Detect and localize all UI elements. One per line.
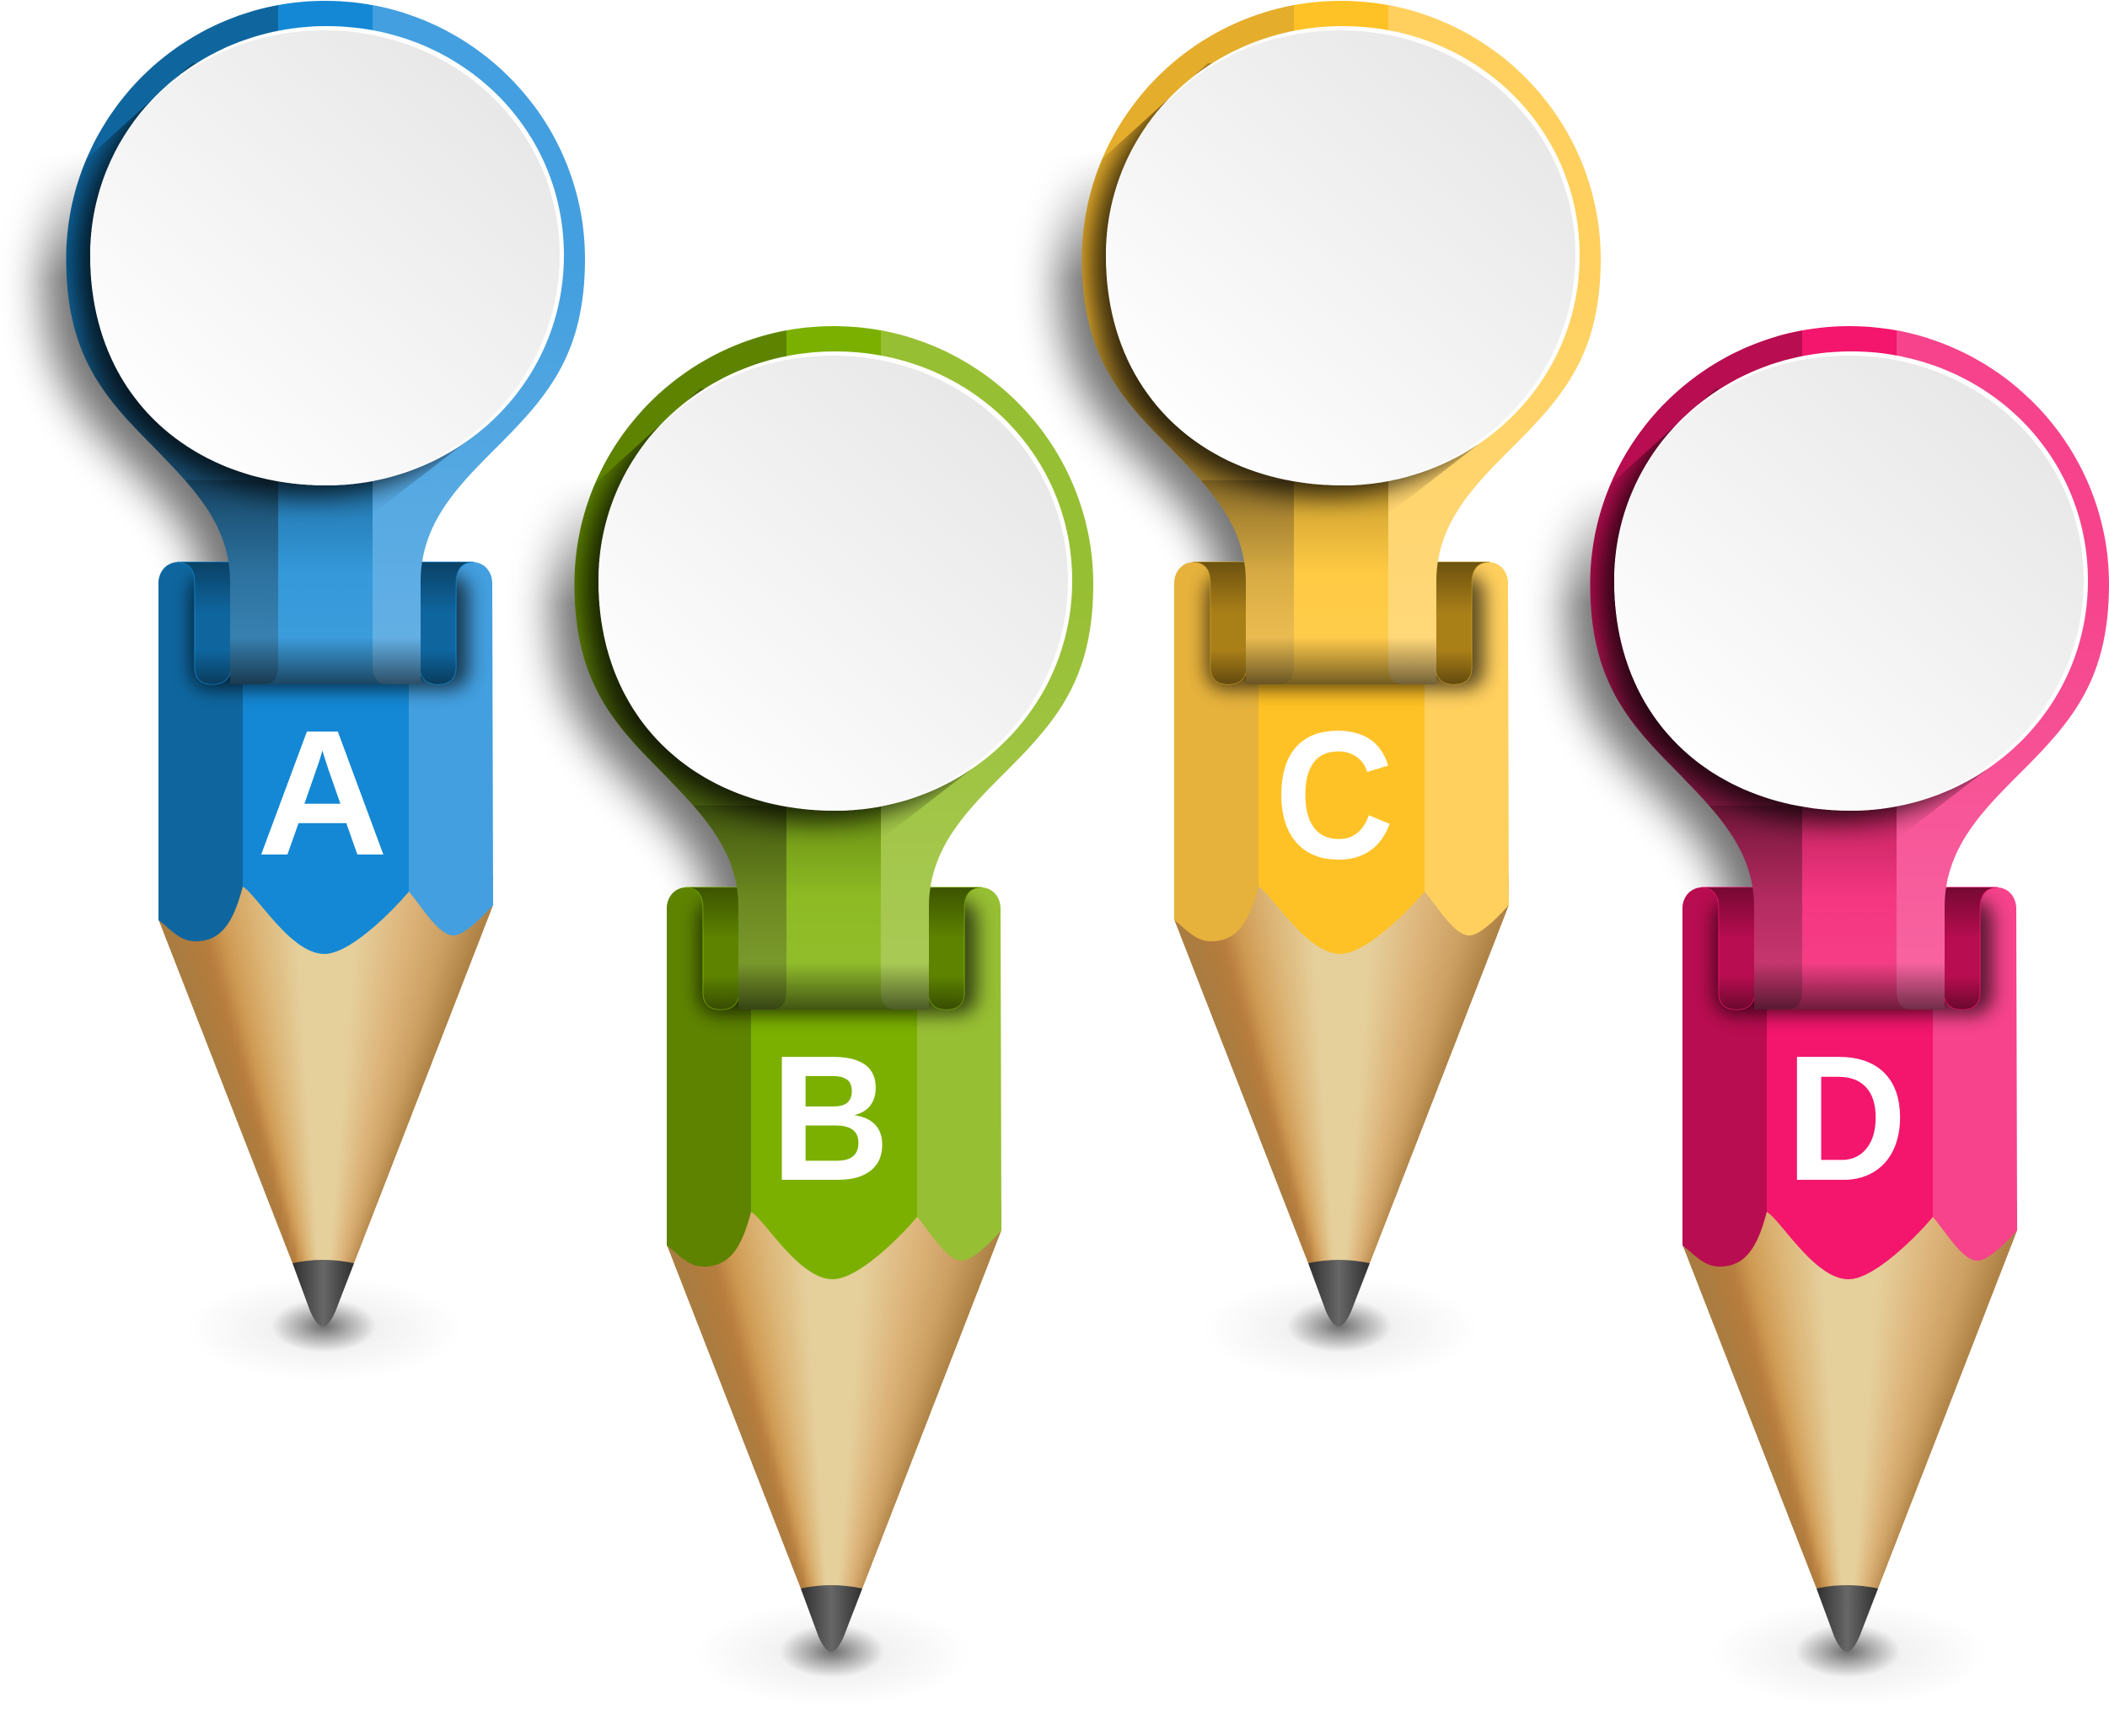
balloon head and neck	[1590, 326, 2109, 1010]
pencil B	[491, 325, 1183, 1707]
wood cone	[135, 860, 510, 1315]
head drop shadow	[551, 345, 1070, 1028]
tip ground shadow	[185, 1277, 464, 1381]
pencil lead	[1308, 1260, 1370, 1326]
pencil lead	[801, 1585, 862, 1652]
tip ground shadow	[1201, 1277, 1479, 1381]
coloured pencil body	[660, 881, 1008, 1286]
white disc	[1614, 351, 2088, 811]
rolled side tabs	[177, 562, 474, 684]
rolled side tabs	[685, 887, 982, 1010]
head shading	[0, 40, 598, 691]
pencil lead	[292, 1260, 354, 1326]
white disc	[598, 351, 1072, 811]
body shadow beneath fold	[699, 900, 977, 1015]
body shadow beneath fold	[1715, 900, 1993, 1015]
rolled side tabs	[1701, 887, 1998, 1010]
wood cone	[1659, 1185, 2034, 1641]
head shading	[491, 366, 1107, 1016]
letter A: A	[256, 693, 388, 892]
tip ground shadow	[1709, 1602, 1988, 1707]
rolled side tabs	[1193, 562, 1489, 684]
head drop shadow	[1059, 19, 1577, 703]
tip ground shadow	[694, 1602, 972, 1707]
wood cone	[1151, 860, 1526, 1315]
letter C: C	[1275, 693, 1394, 897]
body shadow beneath fold	[191, 575, 469, 689]
balloon head and neck	[1082, 1, 1601, 684]
pencil A	[0, 0, 674, 1381]
wood cone	[643, 1185, 1018, 1641]
head shading	[999, 40, 1614, 691]
coloured pencil body	[1167, 556, 1516, 961]
pencil lead	[1817, 1585, 1878, 1652]
white disc	[90, 26, 564, 485]
pencil C	[999, 0, 1690, 1381]
head drop shadow	[1566, 345, 2085, 1028]
pencil D	[1507, 325, 2109, 1707]
letter B: B	[770, 1018, 890, 1218]
balloon head and neck	[575, 326, 1093, 1010]
letter D: D	[1785, 1018, 1907, 1218]
balloon head and neck	[66, 1, 585, 684]
body shadow beneath fold	[1206, 575, 1484, 689]
coloured pencil body	[1676, 881, 2024, 1286]
head shading	[1507, 366, 2109, 1016]
head drop shadow	[42, 19, 561, 703]
coloured pencil body	[152, 556, 500, 961]
white disc	[1106, 26, 1580, 485]
